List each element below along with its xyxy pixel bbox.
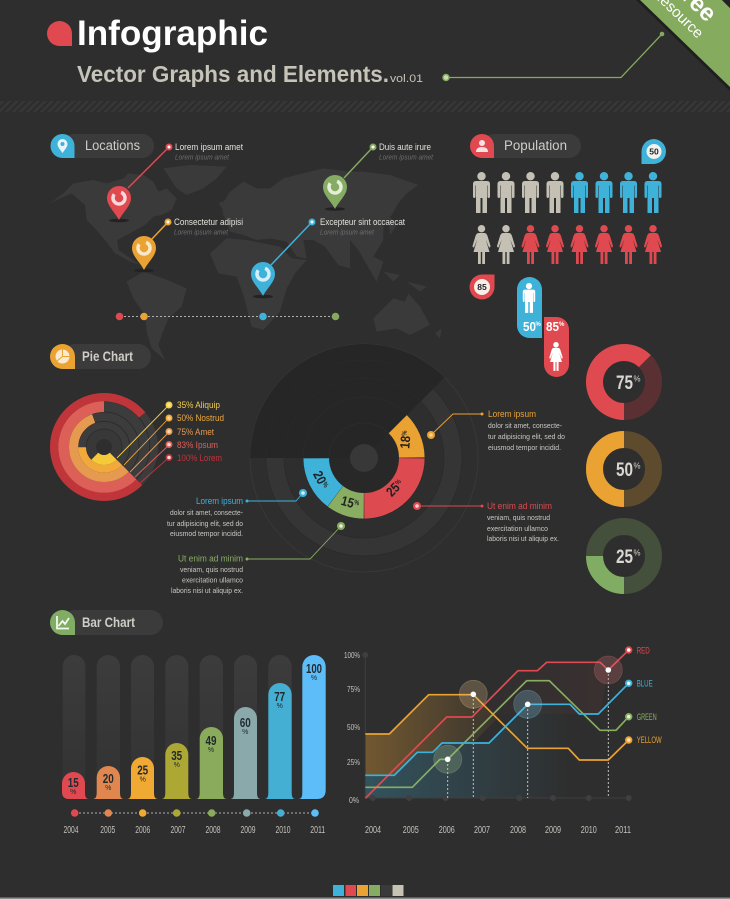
bar value labels: % xyxy=(140,776,146,784)
bar value labels: 35 xyxy=(171,748,182,763)
bubble: 50 xyxy=(642,139,666,164)
donut percentage labels xyxy=(310,430,414,513)
callout: yellow: dolor sit amet, consecte- xyxy=(488,421,562,430)
x axis year labels: 2008 xyxy=(510,825,526,836)
series lines xyxy=(365,650,629,798)
world map xyxy=(50,165,442,360)
bar value labels: % xyxy=(70,789,76,796)
panel: progress rings xyxy=(594,352,654,586)
bar value labels: % xyxy=(105,785,111,792)
section badge: pie chart: Pie Chart xyxy=(82,349,133,364)
y axis labels: 25% xyxy=(347,757,360,767)
panel: locations xyxy=(50,134,442,360)
x axis year labels: 2004 xyxy=(365,825,381,836)
callout: red: laboris nisi ut aliquip ex. xyxy=(487,534,559,543)
bar value labels: 77 xyxy=(274,689,285,704)
y axis labels: 75% xyxy=(347,684,360,694)
callout: red: Ut enim ad minim xyxy=(487,501,552,511)
callout: green: exercitation ullamco xyxy=(182,576,243,584)
callout: blue: Lorem ipsum xyxy=(196,496,243,506)
y axis labels: 100% xyxy=(344,650,360,660)
section badge: locations: Locations xyxy=(85,138,140,153)
bar value labels: 15 xyxy=(68,775,79,790)
callout: red: veniam, quis nostrud xyxy=(487,513,550,522)
series end labels: GREEN xyxy=(637,712,657,723)
bar value labels: % xyxy=(242,729,248,736)
bar tracks xyxy=(63,655,292,799)
bar value labels: % xyxy=(277,703,283,710)
bar year labels xyxy=(64,825,325,836)
bubble: 85: 85 xyxy=(477,282,487,292)
pie legend: 50% Nostrud xyxy=(177,413,224,423)
ring: 75 percent: % xyxy=(634,374,640,384)
donut segments xyxy=(296,390,432,526)
icon: red title drop xyxy=(47,21,72,46)
ring: 25 percent: 25 xyxy=(616,547,633,568)
volume label: vol.01 xyxy=(390,73,423,85)
subtitle: Vector Graphs and Elements. xyxy=(77,61,389,87)
title: Infographic xyxy=(77,14,268,53)
ribbon: free resource xyxy=(636,0,730,91)
x axis year labels: 2005 xyxy=(403,825,419,836)
ring: 25 percent: % xyxy=(634,548,640,558)
donut percentage labels: % xyxy=(394,478,403,487)
axes xyxy=(363,652,631,800)
bars xyxy=(62,655,326,799)
donut percentage labels: 20 xyxy=(310,468,329,487)
callout: blue: dolor sit amet, consecte- xyxy=(170,508,243,517)
bar value labels: 100 xyxy=(306,661,322,676)
location timeline xyxy=(116,313,339,320)
panel: line chart xyxy=(344,646,662,836)
callout: blue xyxy=(167,489,307,538)
pie legend: 75% Amet xyxy=(177,427,214,437)
callout: green: laboris nisi ut aliquip ex. xyxy=(171,586,243,595)
footer colour swatches xyxy=(333,885,404,896)
location: green pin: Lorem ipsum amet xyxy=(379,154,434,162)
location: red pin: Lorem ipsum amet xyxy=(175,142,243,153)
donut percentage labels: 18 xyxy=(397,435,414,449)
x axis year labels: 2011 xyxy=(615,825,631,836)
bar value labels: % xyxy=(311,675,317,682)
bar value labels: 20 xyxy=(103,771,114,786)
callout: blue: tur adipisicing elit, sed do xyxy=(167,519,243,528)
location: blue pin xyxy=(251,217,405,298)
location: red pin: Lorem ipsum amet xyxy=(175,154,230,162)
location: yellow pin xyxy=(132,217,243,272)
location: yellow pin: Lorem ipsum amet xyxy=(174,230,229,236)
bar value labels: % xyxy=(174,762,180,769)
location: green pin xyxy=(323,142,434,211)
pie legend: 35% Aliquip xyxy=(177,400,220,410)
bar year labels: 2011 xyxy=(310,825,325,836)
drop lines xyxy=(448,670,608,798)
pie legend: 100% Lorem xyxy=(177,453,222,463)
women row xyxy=(472,225,662,264)
section badge: pie chart xyxy=(50,344,151,369)
bar year labels: 2009 xyxy=(240,825,256,836)
donut percentage labels: % xyxy=(353,499,360,508)
pill: men 50 percent: 50 xyxy=(523,320,536,334)
callout: yellow: eiusmod tempor incidid. xyxy=(488,443,561,452)
footer line xyxy=(0,898,730,899)
pie legend xyxy=(166,400,224,463)
bar year labels: 2006 xyxy=(135,825,150,836)
callout: blue: eiusmod tempor incidid. xyxy=(170,529,243,538)
donut percentage labels: 15 xyxy=(339,493,356,511)
bar year labels: 2010 xyxy=(276,825,291,836)
location: blue pin: Excepteur sint occaecat xyxy=(320,217,405,228)
x axis year labels: 2007 xyxy=(474,825,490,836)
ring: 75 percent xyxy=(594,352,654,412)
bubble: 85 xyxy=(469,274,494,300)
callout: red xyxy=(413,501,559,543)
y axis labels: 0% xyxy=(349,795,359,805)
callout: yellow: tur adipisicing elit, sed do xyxy=(488,432,565,441)
concentric radial chart xyxy=(34,377,174,517)
ring: 50 percent: 50 xyxy=(616,460,633,481)
series end labels: BLUE xyxy=(637,678,653,690)
pill: men 50 percent: % xyxy=(536,322,542,328)
pie legend: 83% Ipsum xyxy=(177,440,218,450)
bar year labels: 2007 xyxy=(170,825,186,836)
callout: green: Ut enim ad minim xyxy=(178,554,243,564)
location: red pin xyxy=(107,142,243,222)
callout: yellow: Lorem ipsum xyxy=(488,409,536,419)
section badge: locations xyxy=(50,134,154,158)
donut percentage labels: % xyxy=(401,430,409,436)
radar background rings xyxy=(250,344,478,572)
x axis year labels xyxy=(365,825,631,836)
series end labels: RED xyxy=(637,646,650,656)
x axis year labels: 2010 xyxy=(581,825,597,836)
panel: central donut chart xyxy=(167,344,565,595)
header connector line xyxy=(443,32,664,80)
panel: pie chart xyxy=(34,344,224,517)
bar value labels: % xyxy=(208,747,214,754)
ring: 25 percent xyxy=(594,526,654,586)
bar year labels: 2004 xyxy=(64,825,79,836)
y axis labels: 50% xyxy=(347,722,360,732)
bar value labels: 25 xyxy=(137,762,148,778)
bar value labels: 49 xyxy=(206,733,216,748)
bar timeline dots xyxy=(71,809,319,817)
donut percentage labels: % xyxy=(320,481,330,489)
pill: women 85 percent xyxy=(544,317,569,377)
callout: red: exercitation ullamco xyxy=(487,524,548,533)
pill: women 85 percent: 85 xyxy=(546,320,559,334)
series end labels xyxy=(625,646,662,746)
section badge: bar chart: Bar Chart xyxy=(82,615,135,630)
pie legend leader lines xyxy=(117,405,169,483)
location: yellow pin: Consectetur adipisi xyxy=(174,217,243,228)
donut percentage labels: 25 xyxy=(383,480,403,500)
section badge: population: Population xyxy=(504,138,567,153)
section badge: bar chart xyxy=(50,610,163,635)
callout: yellow xyxy=(427,409,565,452)
ring: 75 percent: 75 xyxy=(616,373,633,394)
area fills xyxy=(365,662,608,798)
section badge: population xyxy=(470,134,581,158)
location: blue pin: Lorem ipsum amet xyxy=(320,230,375,236)
series end labels: YELLOW xyxy=(637,735,662,746)
pill: men 50 percent xyxy=(517,277,542,338)
x axis year labels: 2006 xyxy=(439,825,455,836)
pill: women 85 percent: % xyxy=(559,322,565,328)
x axis year labels: 2009 xyxy=(545,825,561,836)
bar value labels xyxy=(68,661,322,796)
bubble: 50: 50 xyxy=(649,146,659,156)
callout: green: veniam, quis nostrud xyxy=(180,565,243,574)
ring: 50 percent xyxy=(594,440,654,498)
header xyxy=(47,0,730,91)
panel: bar chart xyxy=(50,610,326,836)
callout: green xyxy=(171,522,345,595)
panel: population xyxy=(469,134,666,377)
hatched divider band xyxy=(0,101,730,112)
location: green pin: Duis aute irure xyxy=(379,142,431,153)
y axis labels xyxy=(344,650,360,805)
ring: 50 percent: % xyxy=(634,462,640,470)
men row xyxy=(473,172,662,213)
bar value labels: 60 xyxy=(240,715,251,730)
highlight markers xyxy=(434,656,622,773)
bar year labels: 2005 xyxy=(100,825,115,836)
bar year labels: 2008 xyxy=(206,825,221,836)
